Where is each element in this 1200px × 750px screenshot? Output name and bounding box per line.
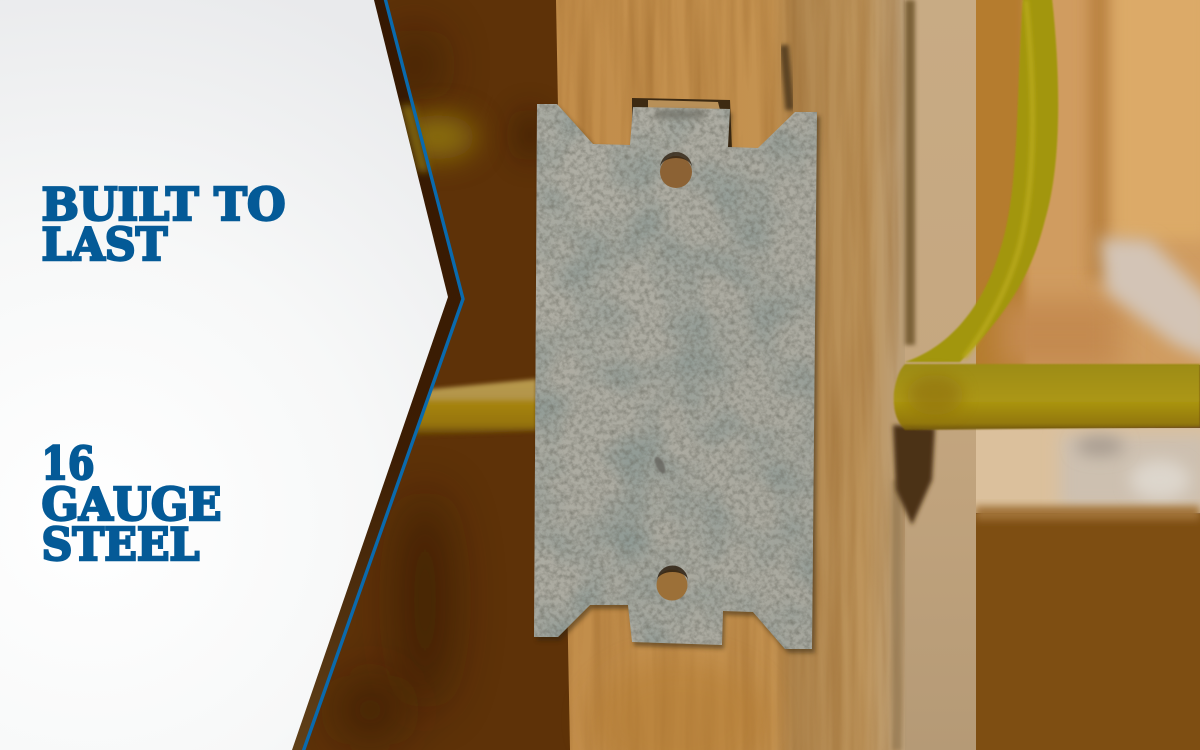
wire left tone <box>907 375 963 415</box>
lower seam shadow <box>892 480 902 750</box>
second stud <box>905 0 976 750</box>
yellow wire left <box>396 379 537 436</box>
right background area <box>965 0 1200 750</box>
photo background: wall framing <box>280 0 1200 750</box>
blurred yellow reflection <box>400 115 476 159</box>
plate top slot shadow <box>632 98 732 150</box>
metal nail plate <box>534 104 820 653</box>
stud seam dark line <box>905 0 915 345</box>
yellow reflection on band <box>400 105 430 172</box>
stud lower wood tone <box>590 660 770 750</box>
heading: 16 gauge steel: 16 <box>42 437 94 490</box>
yellow wire vertical <box>905 0 1058 362</box>
dark band behind panel edge <box>288 0 463 750</box>
heading: built to last <box>42 178 286 271</box>
stud dark smudge <box>784 45 790 110</box>
white chevron panel <box>0 0 448 750</box>
wire highlight <box>964 0 1032 358</box>
heading: 16 gauge steel <box>42 437 222 571</box>
yellow wire right <box>894 364 1200 430</box>
main stud <box>556 0 905 750</box>
heading: built to last: BUILT TO <box>42 178 286 231</box>
heading: built to last: LAST <box>42 218 168 271</box>
wood knot below wire <box>893 425 935 525</box>
hole: top <box>660 156 692 188</box>
blue chevron line <box>303 0 463 750</box>
cavity shadows <box>334 29 544 746</box>
hole: bottom <box>656 570 688 600</box>
dark cavity left of stud <box>280 0 570 750</box>
heading: 16 gauge steel: GAUGE <box>42 478 222 531</box>
scratch marks <box>653 455 667 475</box>
heading: 16 gauge steel: STEEL <box>42 518 200 571</box>
tab smudge <box>655 110 705 119</box>
